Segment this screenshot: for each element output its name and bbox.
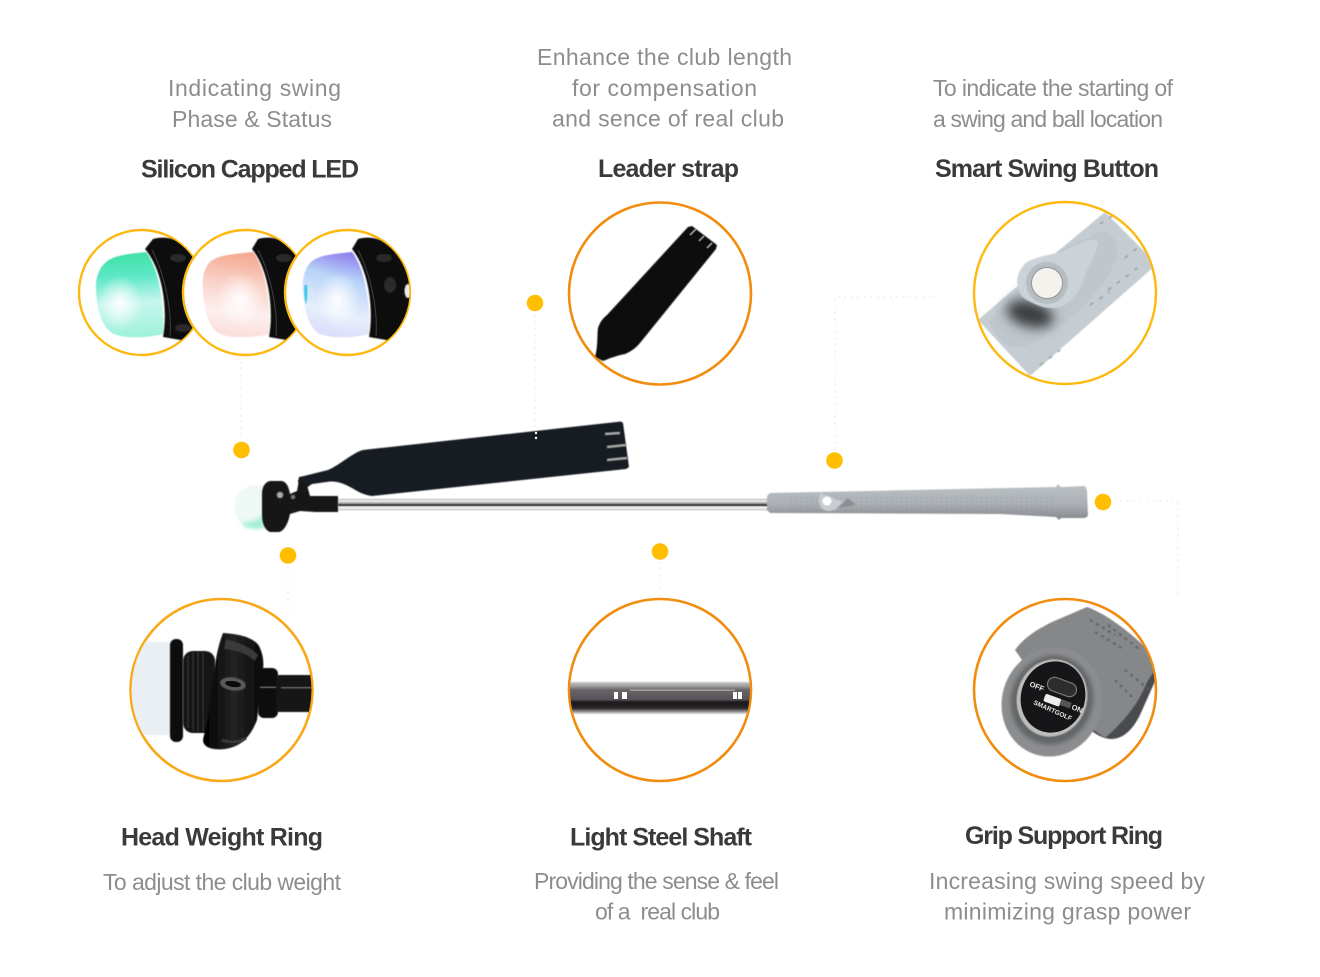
circle: smart swing button detail	[974, 202, 1157, 384]
switch labels: OFF	[1028, 680, 1046, 694]
circle: light steel shaft detail	[565, 599, 755, 781]
heading block: silicon capped LED: Phase & Status	[172, 106, 332, 132]
LED trio of circles	[79, 230, 415, 355]
club with strap, shaft, grip	[235, 422, 1088, 532]
caption: grip support ring: minimizing grasp power	[944, 898, 1191, 924]
club head	[262, 480, 338, 532]
LED circle: red	[182, 228, 296, 356]
caption: light steel shaft: of a real club	[595, 898, 720, 924]
heading block: leader strap	[537, 44, 792, 183]
caption: grip support ring: Increasing swing speed by	[929, 868, 1206, 894]
caption: light steel shaft: Providing the sense & feel	[534, 868, 779, 894]
heading block: silicon capped LED	[141, 75, 359, 184]
club grip	[767, 484, 1088, 520]
LED dome	[235, 485, 264, 529]
heading block: silicon capped LED: Silicon Capped LED	[141, 156, 359, 184]
heading block: leader strap: and sence of real club	[552, 106, 784, 132]
heading block: smart swing button	[933, 75, 1174, 183]
switch labels	[1030, 682, 1083, 720]
heading block: leader strap: Enhance the club length	[537, 44, 792, 70]
heading block: smart swing button: Smart Swing Button	[935, 155, 1159, 183]
switch labels: ON	[1070, 703, 1084, 715]
caption: light steel shaft	[534, 824, 779, 924]
caption: head weight ring: To adjust the club weight	[103, 869, 342, 895]
club strap	[298, 422, 629, 496]
club shaft	[338, 498, 770, 510]
caption: head weight ring: Head Weight Ring	[121, 824, 323, 852]
circle: leader strap detail	[569, 202, 751, 384]
switch labels: SMARTGOLF	[1032, 699, 1073, 723]
circle: head weight ring detail	[125, 599, 316, 781]
heading block: silicon capped LED: Indicating swing	[168, 75, 341, 101]
marker dots	[233, 295, 1111, 564]
strap holes	[535, 432, 537, 439]
heading block: leader strap: Leader strap	[598, 155, 739, 183]
circle: grip support ring detail	[974, 599, 1160, 781]
heading block: leader strap: for compensation	[572, 75, 757, 101]
strap ticks	[605, 433, 627, 460]
LED circle: green	[79, 230, 210, 355]
caption: grip support ring	[929, 822, 1206, 924]
connector lines	[241, 297, 1178, 616]
caption: light steel shaft: Light Steel Shaft	[570, 824, 753, 852]
LED circle: blue	[285, 230, 415, 355]
heading block: smart swing button: a swing and ball location	[933, 106, 1163, 132]
caption: grip support ring: Grip Support Ring	[965, 822, 1163, 850]
caption: head weight ring	[103, 824, 342, 895]
heading block: smart swing button: To indicate the starting of	[933, 75, 1174, 101]
